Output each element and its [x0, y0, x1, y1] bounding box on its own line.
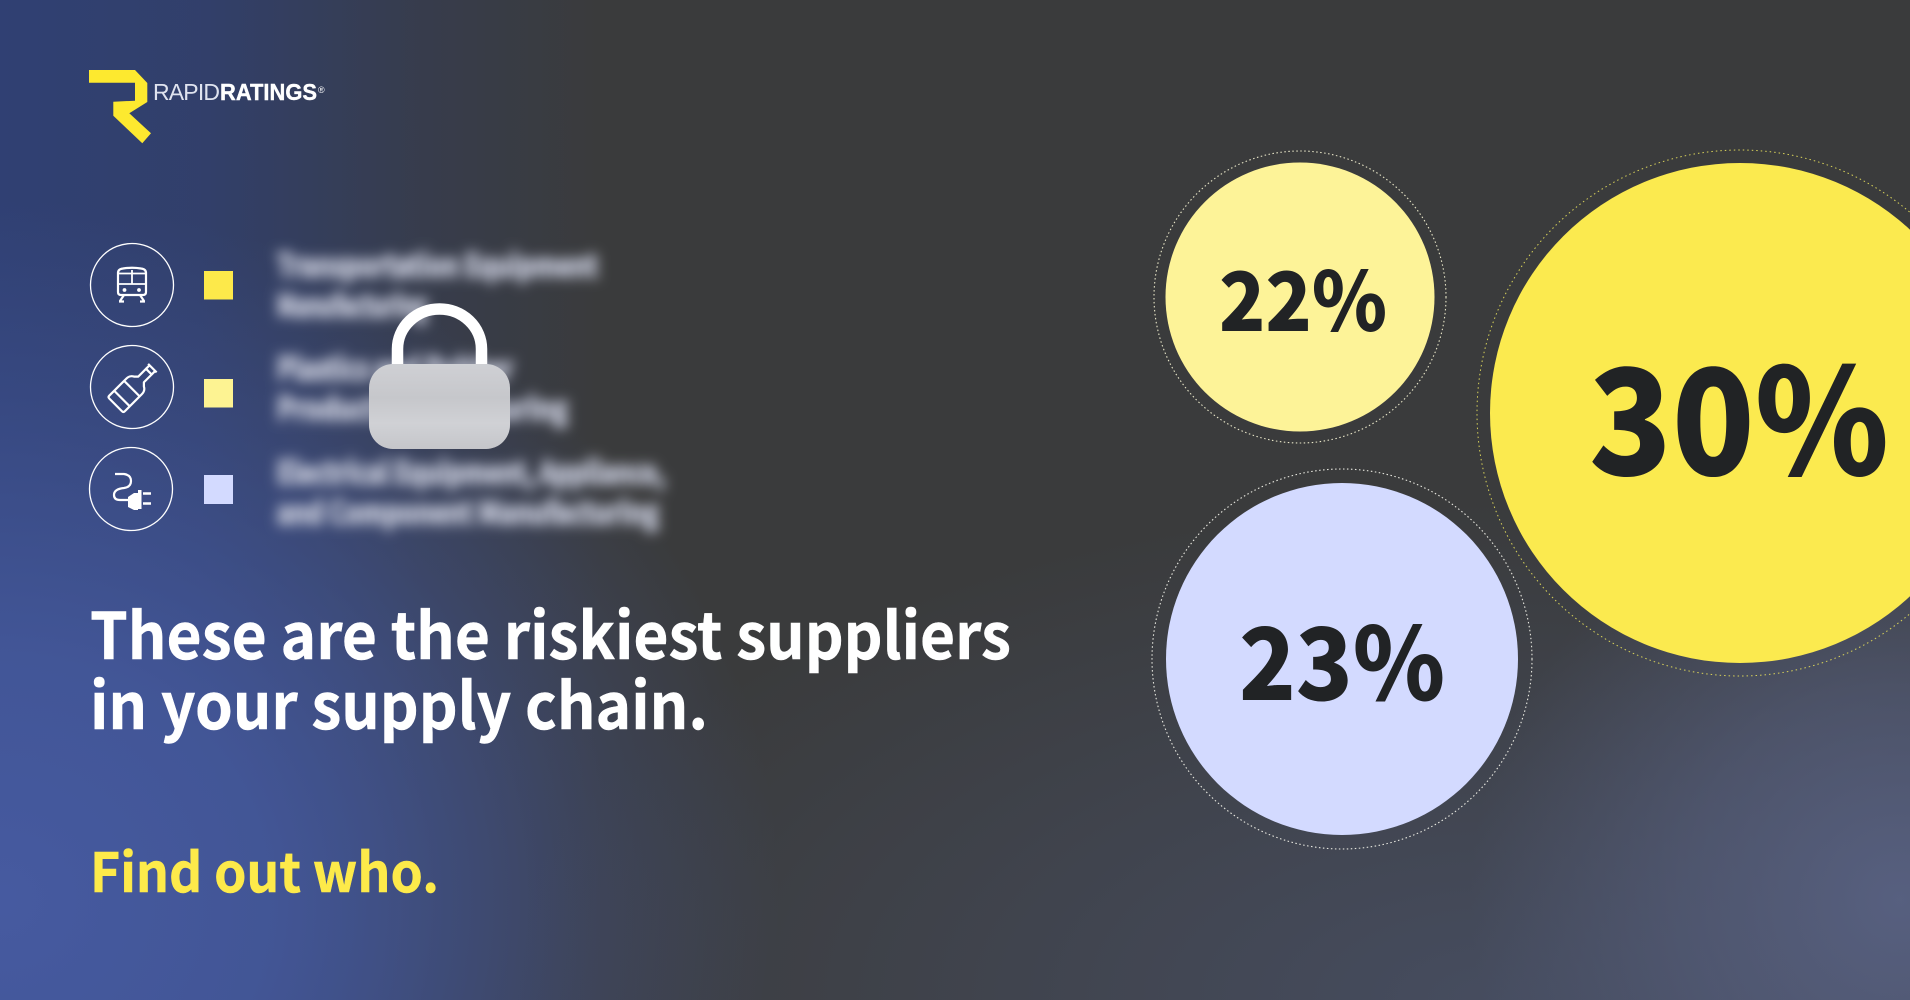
logo wordmark bold: RATINGS	[220, 79, 317, 105]
logo mark: yellow R	[89, 70, 151, 143]
headline: in your supply chain.	[90, 656, 708, 748]
logo: RapidRatings	[89, 70, 325, 143]
blurred legend labels: Plastics and Rubber	[277, 344, 513, 390]
icon: train	[90, 244, 174, 326]
blurred legend labels: Manufacturing	[277, 281, 427, 327]
legend swatch: plastics	[204, 379, 233, 408]
blurred legend labels: Transportation Equipment	[277, 241, 598, 287]
blurred legend labels: Product Manufacturing	[277, 384, 568, 430]
logo wordmark light: RAPID	[153, 79, 220, 105]
icon: plug	[90, 448, 172, 530]
bubble: 30%: 30%	[1589, 305, 1889, 518]
bubble: 23%: 23%	[1239, 584, 1445, 729]
icon: padlock	[369, 309, 510, 449]
icon: bottle	[90, 346, 174, 428]
bubble: 23%	[1152, 469, 1532, 849]
blurred legend labels: Electrical Equipment, Appliance,	[277, 448, 665, 494]
headline: These are the riskiest suppliers	[90, 586, 1011, 678]
legend swatch: transportation	[204, 271, 233, 300]
bubble: 30%	[1477, 150, 1910, 676]
blurred legend labels: and Component Manufacturing	[277, 488, 659, 534]
bubble: 22%: 22%	[1219, 236, 1387, 355]
call to action: Find out who.	[90, 829, 439, 908]
bubble: 22%	[1154, 151, 1446, 443]
blurred legend labels	[277, 241, 665, 534]
legend swatch: electrical	[204, 475, 233, 504]
logo registered mark: ®	[318, 85, 325, 95]
